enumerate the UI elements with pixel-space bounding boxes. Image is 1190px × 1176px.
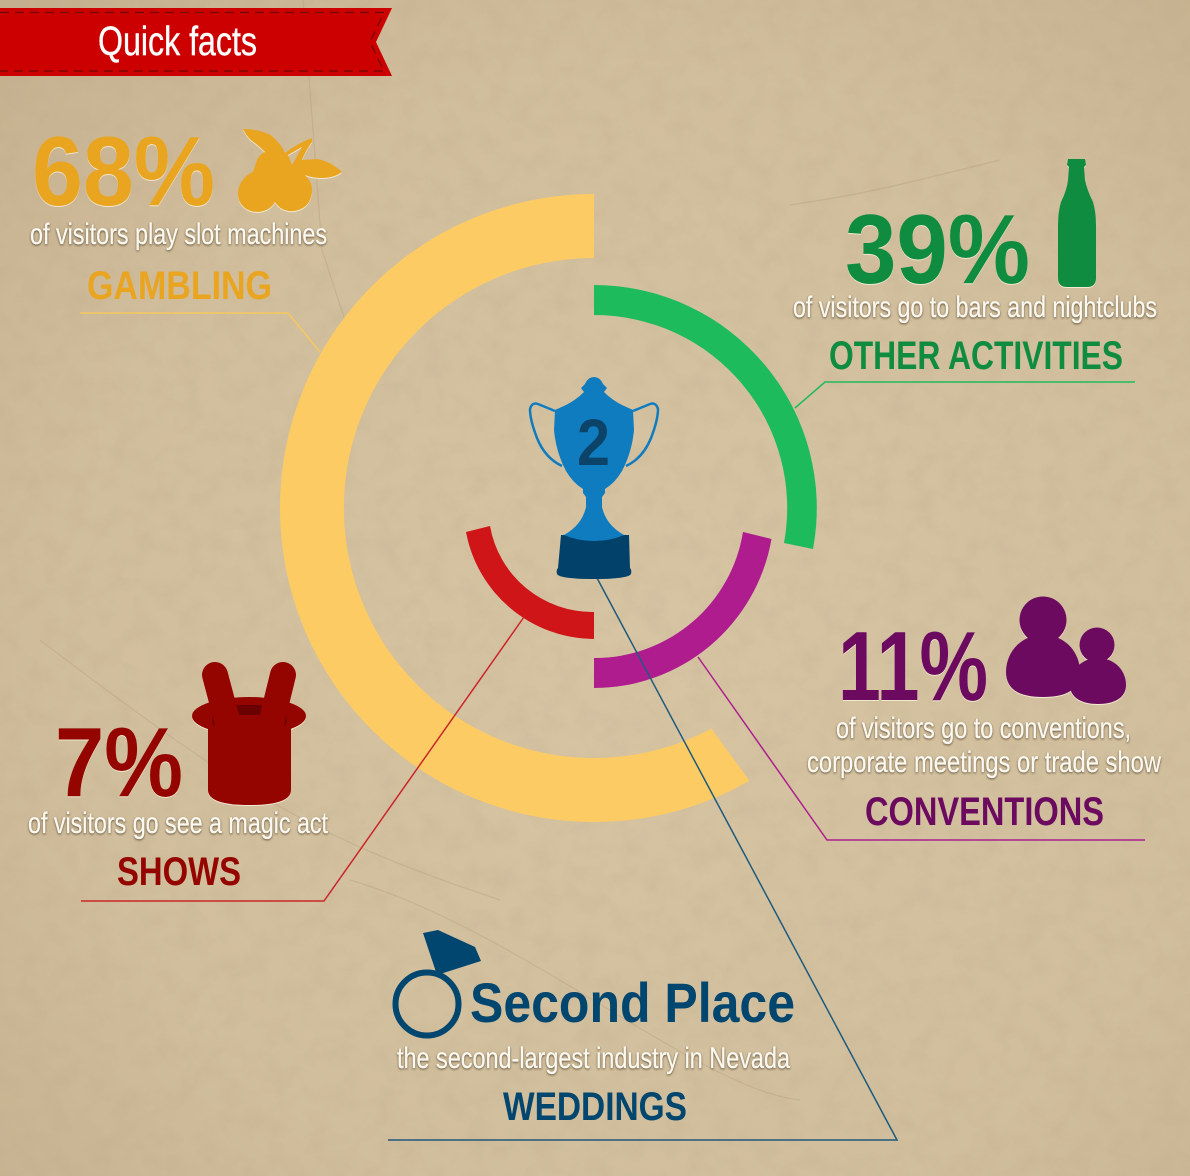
leader line: gambling — [80, 313, 320, 352]
ring: gambling 68% — [280, 194, 750, 822]
icon: cherries — [238, 129, 342, 212]
description: of visitors play slot machines — [30, 218, 327, 251]
description: the second-largest industry in Nevada — [397, 1042, 790, 1075]
category label: GAMBLING — [87, 264, 272, 308]
panel: weddings — [396, 930, 795, 1129]
icon: bottle — [1058, 159, 1096, 287]
icon: trophy — [530, 377, 658, 579]
stat: 68%: 68% — [32, 116, 215, 226]
ring: other activities 39% — [594, 285, 817, 549]
panel: conventions — [807, 596, 1161, 834]
ring: shows 7% — [466, 526, 594, 639]
icon: magic hat — [192, 675, 306, 805]
category label: SHOWS — [117, 850, 241, 894]
category label: WEDDINGS — [503, 1085, 687, 1129]
category label: CONVENTIONS — [865, 790, 1104, 834]
icon: people — [1006, 596, 1126, 704]
chart: concentric ring segments — [280, 194, 817, 822]
leader line: weddings — [388, 578, 897, 1140]
icon: trophy: 2 — [577, 405, 610, 479]
title ribbon: Quick facts — [0, 8, 392, 76]
ring: conventions 11% — [594, 532, 772, 688]
title ribbon: Quick facts: Quick facts — [98, 18, 257, 64]
panel: shows — [28, 675, 329, 894]
panel: gambling — [30, 116, 342, 308]
description: of visitors go see a magic act — [28, 807, 329, 840]
stat: 7%: 7% — [55, 707, 183, 817]
panel: other activities — [793, 159, 1157, 378]
icon: diamond ring — [396, 930, 481, 1036]
leader line: conventions — [698, 657, 1145, 840]
stat: 39%: 39% — [845, 194, 1030, 304]
category label: OTHER ACTIVITIES — [829, 334, 1123, 378]
leader line: shows — [81, 617, 524, 901]
stat: 11%: 11% — [838, 611, 988, 721]
heading: Second Place: Second Place — [470, 971, 795, 1034]
leader line: other activities — [795, 382, 1135, 408]
